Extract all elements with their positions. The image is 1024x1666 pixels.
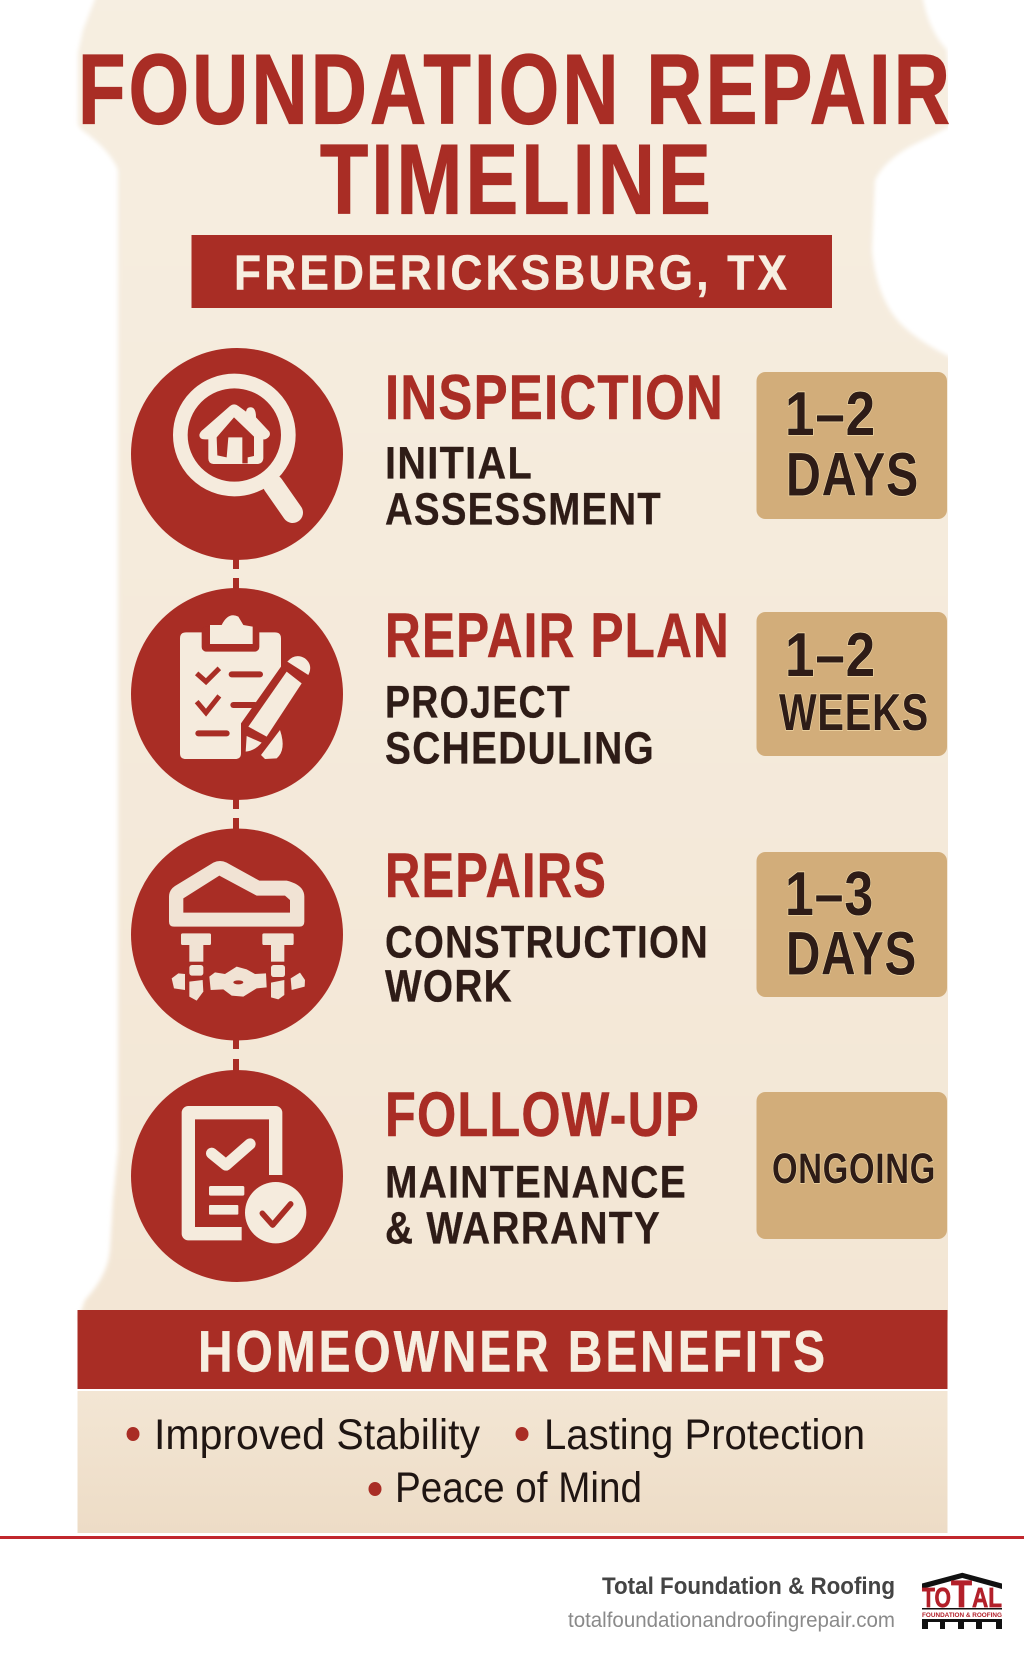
duration badge: DAYS [786, 920, 917, 988]
step description: SCHEDULING [385, 722, 655, 774]
duration badge: WEEKS [779, 684, 929, 742]
title [78, 34, 953, 234]
logo: total foundation and roofing [922, 1573, 1002, 1629]
step heading: REPAIR PLAN [385, 601, 730, 671]
icon: foundation with piers [131, 828, 343, 1040]
footer divider line [0, 1536, 1024, 1539]
benefit: peace of mind: Peace of Mind [395, 1464, 642, 1512]
step description [385, 676, 655, 774]
benefits panel [78, 1391, 948, 1533]
duration badge [756, 612, 947, 756]
duration badge [756, 852, 947, 997]
step description: PROJECT [385, 676, 571, 728]
duration badge: 1–2 [785, 380, 876, 449]
logo: total foundation and roofing: FOUNDATION & ROOFING [922, 1612, 1002, 1619]
icon: clipboard and pencil [131, 588, 343, 800]
duration badge: 1–3 [785, 860, 874, 929]
benefit: improved stability: Improved Stability [154, 1411, 480, 1459]
duration badge [756, 372, 947, 519]
step description: ASSESSMENT [385, 484, 662, 534]
step heading: REPAIRS [385, 841, 607, 911]
step 1: inspection [131, 348, 947, 560]
step description: INITIAL [385, 438, 533, 488]
duration badge: DAYS [786, 440, 919, 508]
step heading: FOLLOW-UP [385, 1080, 700, 1150]
icon: magnifying glass over house [131, 348, 343, 560]
footer website: totalfoundationandroofingrepair.com [568, 1609, 895, 1632]
logo: total foundation and roofing: TO [922, 1582, 951, 1613]
footer company name: Total Foundation & Roofing [602, 1573, 895, 1600]
step 2: repair plan [131, 588, 947, 800]
homeowner benefits heading band: HOMEOWNER BENEFITS [198, 1320, 828, 1384]
benefit: lasting protection: Lasting Protection [544, 1411, 865, 1459]
step description [385, 438, 662, 534]
logo: total foundation and roofing: AL [972, 1582, 1002, 1613]
background: cream paper panel [78, 0, 952, 1320]
step 3: repairs [131, 828, 947, 1040]
logo: total foundation and roofing: T [951, 1574, 972, 1616]
step description: MAINTENANCE [385, 1156, 687, 1208]
duration badge: ONGOING [772, 1145, 936, 1193]
timeline connectors [233, 558, 239, 1072]
step 4: follow-up [131, 1070, 947, 1282]
title: TIMELINE [320, 124, 714, 234]
icon: checklist document with check badge [131, 1070, 343, 1282]
step description [385, 1156, 687, 1254]
duration badge [756, 1092, 947, 1239]
step heading: INSPEICTION [385, 363, 724, 433]
duration badge: 1–2 [785, 621, 876, 690]
step description: WORK [385, 960, 513, 1012]
step description: CONSTRUCTION [385, 916, 709, 968]
step description: & WARRANTY [385, 1202, 661, 1254]
step description [385, 916, 709, 1012]
location banner: FREDERICKSBURG, TX [234, 246, 790, 300]
location banner [192, 235, 832, 308]
